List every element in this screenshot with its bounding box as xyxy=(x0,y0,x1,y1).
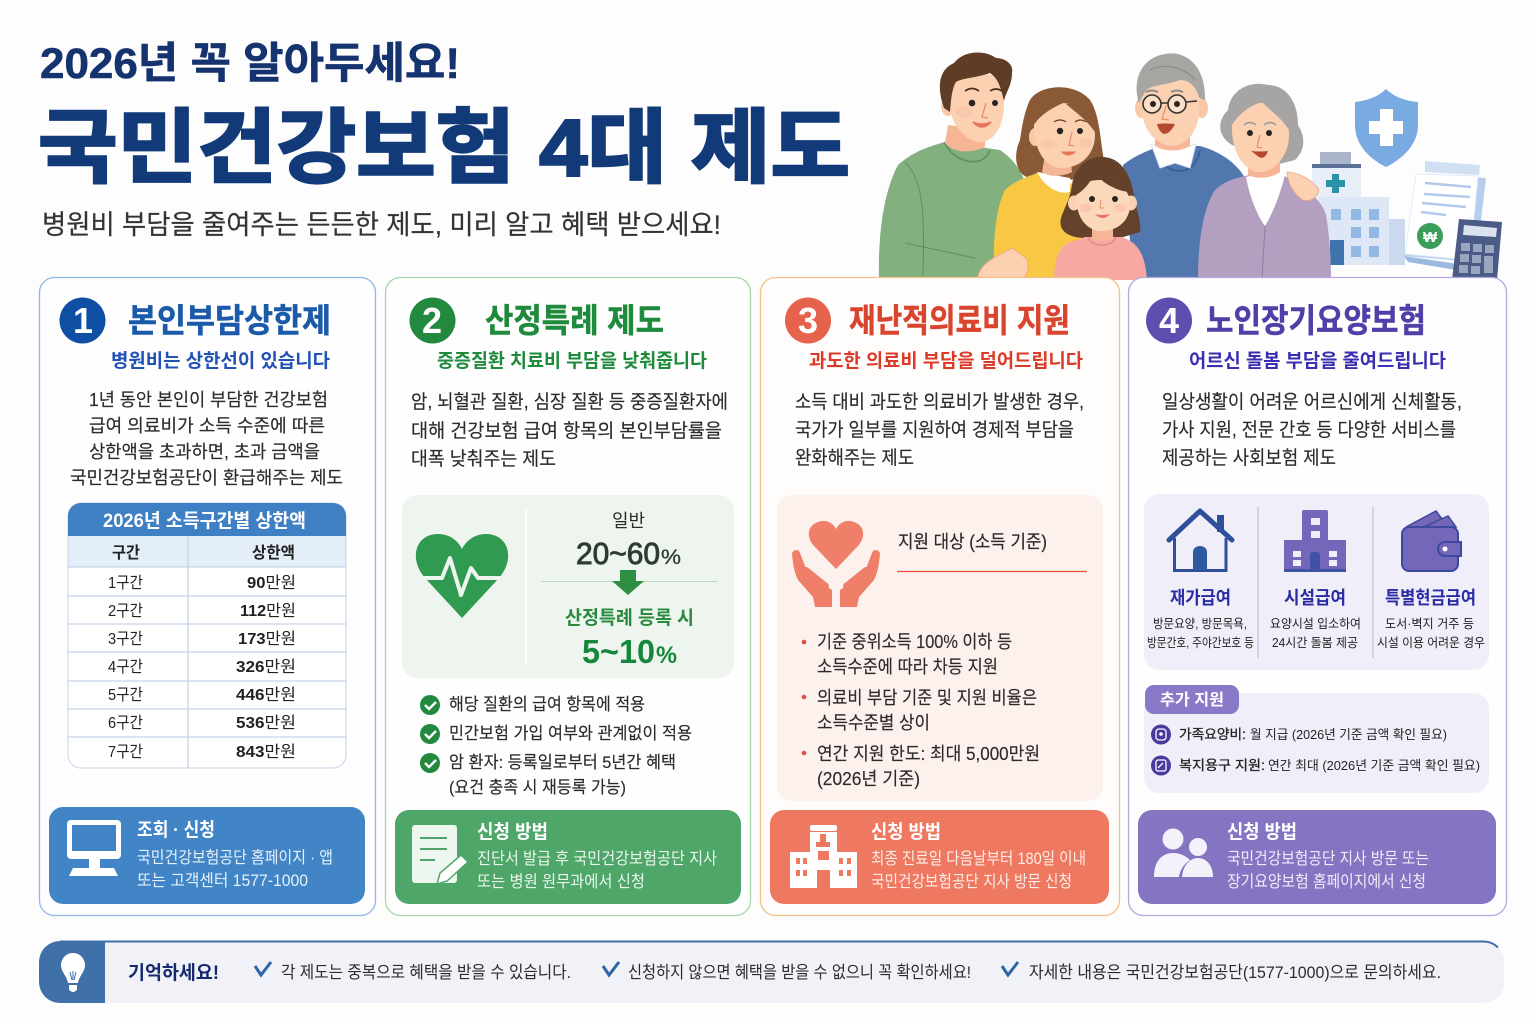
heading: 재난적의료비 지원 xyxy=(849,302,1070,339)
card: copay comparison: 20~60 xyxy=(576,536,660,571)
icon: document and pencil xyxy=(412,825,468,884)
label: special cash benefit: 시설 이용 어려운 경우 xyxy=(1377,636,1485,650)
description xyxy=(411,391,728,470)
heading: 산정특례 제도 xyxy=(485,302,664,339)
icon: hospital building xyxy=(1312,152,1405,265)
card: benefit types xyxy=(1144,494,1489,670)
description xyxy=(1162,391,1462,469)
callout: how to apply xyxy=(770,810,1109,904)
callout: how to apply xyxy=(1138,810,1496,904)
list: support criteria: 연간 지원 한도: 최대 5,000만원 xyxy=(817,744,1040,764)
callout: how to apply: 신청 방법 xyxy=(871,821,941,843)
description: 암, 뇌혈관 질환, 심장 질환 등 중증질환자에 xyxy=(411,391,728,413)
list: support criteria: 기준 중위소득 100% 이하 등 xyxy=(817,632,1012,652)
callout: lookup and apply: 또는 고객센터 1577-1000 xyxy=(137,871,308,890)
callout: lookup and apply: 국민건강보험공단 홈페이지 · 앱 xyxy=(137,848,333,867)
badge: number 4: 4 xyxy=(1159,300,1179,341)
card: copay comparison: 5~10 xyxy=(582,633,655,670)
list: support criteria: 소득수준에 따라 차등 지원 xyxy=(817,657,998,677)
subheading: 중증질환 치료비 부담을 낮춰줍니다 xyxy=(437,350,707,372)
title: year line: 2026년 꼭 알아두세요! xyxy=(40,40,460,88)
label: facility care xyxy=(1270,588,1361,650)
table: income bracket caps: 2구간 xyxy=(108,602,143,620)
label: home care: 방문요양, 방문목욕, xyxy=(1153,617,1247,631)
item: must apply: 신청하지 않으면 혜택을 받을 수 없으니 꼭 확인하세요! xyxy=(628,963,971,982)
table: income bracket caps: 112만원 xyxy=(240,602,296,620)
item: contact: 자세한 내용은 국민건강보험공단(1577-1000)으로 문의하세요. xyxy=(1029,963,1441,982)
table: income bracket caps: 843만원 xyxy=(236,743,296,761)
list: support criteria: (2026년 기준) xyxy=(817,769,920,789)
badge: number 1 xyxy=(60,298,106,344)
table: income bracket caps xyxy=(68,503,346,768)
icon: insurance shield xyxy=(1355,89,1418,167)
list: eligibility checks: 암 환자: 등록일로부터 5년간 혜택 xyxy=(449,753,676,772)
figure: grandfather xyxy=(1123,53,1250,280)
table: income bracket caps: 326만원 xyxy=(236,658,296,676)
badge: number 1: 1 xyxy=(73,300,93,341)
icon: family care xyxy=(1151,724,1171,744)
callout: lookup and apply: 조회 · 신청 xyxy=(137,819,215,841)
card: support target xyxy=(777,495,1103,801)
badge: number 4 xyxy=(1146,298,1192,344)
item: duplicate benefits: 각 제도는 중복으로 혜택을 받을 수 있습니다. xyxy=(281,963,571,982)
panel: 노인장기요양보험 xyxy=(1128,278,1506,916)
label: home care: 재가급여 xyxy=(1170,588,1231,608)
label: facility care: 시설급여 xyxy=(1284,588,1346,608)
banner: remember xyxy=(39,941,1504,1003)
table: income bracket caps: 6구간 xyxy=(108,714,143,732)
callout: how to apply: 국민건강보험공단 지사 방문 또는 xyxy=(1227,849,1429,868)
callout: how to apply: 진단서 발급 후 국민건강보험공단 지사 xyxy=(477,849,717,868)
description xyxy=(70,390,343,488)
label: facility care: 24시간 돌봄 제공 xyxy=(1272,636,1358,650)
table: income bracket caps: 1구간 xyxy=(108,574,143,592)
icon: house xyxy=(1169,511,1232,570)
description: 제공하는 사회보험 제도 xyxy=(1162,447,1336,469)
card: copay comparison xyxy=(402,495,734,678)
title: main heading: 국민건강보험 4대 제도 xyxy=(38,104,850,194)
list: support criteria: 소득수준별 상이 xyxy=(817,713,930,733)
table: income bracket caps: 상한액 xyxy=(252,544,295,562)
icon: heart with pulse xyxy=(416,534,508,618)
icon: document with won coin xyxy=(1404,161,1486,270)
description: 대해 건강보험 급여 항목의 본인부담률을 xyxy=(411,420,722,442)
subheading: 과도한 의료비 부담을 덜어드립니다 xyxy=(809,350,1084,372)
figure: father xyxy=(879,53,1028,280)
icon: people xyxy=(1154,828,1213,877)
card: additional support: 가족요양비: xyxy=(1179,727,1246,742)
figure: father's hand xyxy=(978,248,1028,280)
badge: number 2: 2 xyxy=(422,300,442,341)
table: income bracket caps: 5구간 xyxy=(108,686,143,704)
table: income bracket caps: 2026년 소득구간별 상한액 xyxy=(103,510,306,532)
table: income bracket caps: 536만원 xyxy=(236,714,296,732)
description xyxy=(795,391,1084,469)
callout: how to apply: 신청 방법 xyxy=(477,821,548,843)
badge: number 3 xyxy=(785,298,831,344)
description: 국가가 일부를 지원하여 경제적 부담을 xyxy=(795,419,1074,441)
list: eligibility checks xyxy=(420,695,692,797)
list: eligibility checks: (요건 충족 시 재등록 가능) xyxy=(449,778,626,797)
panel: 산정특례 제도 xyxy=(386,278,750,916)
icon: computer monitor xyxy=(67,820,121,876)
subheading: 어르신 돌봄 부담을 줄여드립니다 xyxy=(1189,350,1447,372)
callout: how to apply: 신청 방법 xyxy=(1227,821,1297,843)
badge: number 2 xyxy=(410,298,456,344)
card: additional support: 추가 지원 xyxy=(1160,691,1224,709)
description: 국민건강보험공단이 환급해주는 제도 xyxy=(70,468,343,488)
callout: how to apply: 또는 병원 원무과에서 신청 xyxy=(477,872,645,891)
callout: lookup and apply xyxy=(49,807,365,904)
heading: 노인장기요양보험 xyxy=(1206,302,1426,339)
label: special cash benefit xyxy=(1377,588,1485,650)
card: additional support: 복지용구 지원: xyxy=(1179,758,1265,773)
description: 대폭 낮춰주는 제도 xyxy=(411,448,556,470)
callout: how to apply: 국민건강보험공단 지사 방문 신청 xyxy=(871,872,1072,891)
icon: wallet xyxy=(1402,511,1461,571)
icon: light bulb xyxy=(61,953,85,992)
panel: 본인부담상한제 xyxy=(40,278,376,916)
card: additional support: 연간 최대 (2026년 기준 금액 확인 필요) xyxy=(1268,758,1480,773)
card: copay comparison: 산정특례 등록 시 xyxy=(565,607,694,629)
heading: 본인부담상한제 xyxy=(128,302,331,339)
card: copay comparison: 일반 xyxy=(612,511,645,531)
card: copay comparison: % xyxy=(661,546,681,569)
figure: girl xyxy=(1054,157,1147,280)
icon: document with won coin: ₩ xyxy=(1423,229,1438,246)
arrow: down xyxy=(612,570,644,595)
icon: heart in hands xyxy=(792,521,880,607)
illustration: family of five xyxy=(879,53,1331,280)
subheading: 병원비는 상한선이 있습니다 xyxy=(111,350,331,372)
label: home care: 방문간호, 주야간보호 등 xyxy=(1147,636,1254,650)
panel: 재난적의료비 지원 xyxy=(760,278,1120,916)
list: eligibility checks: 해당 질환의 급여 항목에 적용 xyxy=(449,695,645,714)
subtitle: 병원비 부담을 줄여주는 든든한 제도, 미리 알고 혜택 받으세요! xyxy=(42,210,721,240)
table: income bracket caps: 3구간 xyxy=(108,630,143,648)
icon: calculator xyxy=(1452,219,1502,280)
card: copay comparison: % xyxy=(656,642,677,669)
label: special cash benefit: 특별현금급여 xyxy=(1385,588,1476,608)
description: 소득 대비 과도한 의료비가 발생한 경우, xyxy=(795,391,1084,413)
callout: how to apply xyxy=(395,810,741,904)
description: 급여 의료비가 소득 수준에 따른 xyxy=(89,416,325,436)
table: income bracket caps: 173만원 xyxy=(238,630,296,648)
description: 일상생활이 어려운 어르신에게 신체활동, xyxy=(1162,391,1462,413)
table: income bracket caps: 구간 xyxy=(112,544,140,562)
list: support criteria xyxy=(802,632,1040,789)
banner: remember: 기억하세요! xyxy=(128,962,219,984)
description: 완화해주는 제도 xyxy=(795,447,914,469)
icon: care facility xyxy=(1284,510,1346,572)
icon: hospital xyxy=(790,825,857,888)
label: home care xyxy=(1147,588,1254,650)
figure: grandmother xyxy=(1198,84,1331,280)
description: 상한액을 초과하면, 초과 금액을 xyxy=(89,442,320,462)
table: income bracket caps: 4구간 xyxy=(108,658,143,676)
card: additional support: 월 지급 (2026년 기준 금액 확인 필요) xyxy=(1250,727,1447,742)
description: 가사 지원, 전문 간호 등 다양한 서비스를 xyxy=(1162,419,1456,441)
card: additional support xyxy=(1144,685,1489,793)
list: eligibility checks: 민간보험 가입 여부와 관계없이 적용 xyxy=(449,724,692,743)
list: support criteria: 의료비 부담 기준 및 지원 비율은 xyxy=(817,688,1037,708)
table: income bracket caps: 7구간 xyxy=(108,743,143,761)
description: 1년 동안 본인이 부담한 건강보험 xyxy=(89,390,328,410)
card: support target: 지원 대상 (소득 기준) xyxy=(898,532,1047,552)
label: facility care: 요양시설 입소하여 xyxy=(1270,617,1361,631)
label: special cash benefit: 도서·벽지 거주 등 xyxy=(1385,617,1474,631)
table: income bracket caps: 446만원 xyxy=(236,686,296,704)
callout: how to apply: 장기요양보험 홈페이지에서 신청 xyxy=(1227,872,1426,891)
badge: number 3: 3 xyxy=(798,300,818,341)
figure: mother xyxy=(994,87,1104,280)
callout: how to apply: 최종 진료일 다음날부터 180일 이내 xyxy=(871,849,1086,868)
table: income bracket caps: 90만원 xyxy=(247,574,296,592)
icon: welfare equipment xyxy=(1151,756,1171,776)
